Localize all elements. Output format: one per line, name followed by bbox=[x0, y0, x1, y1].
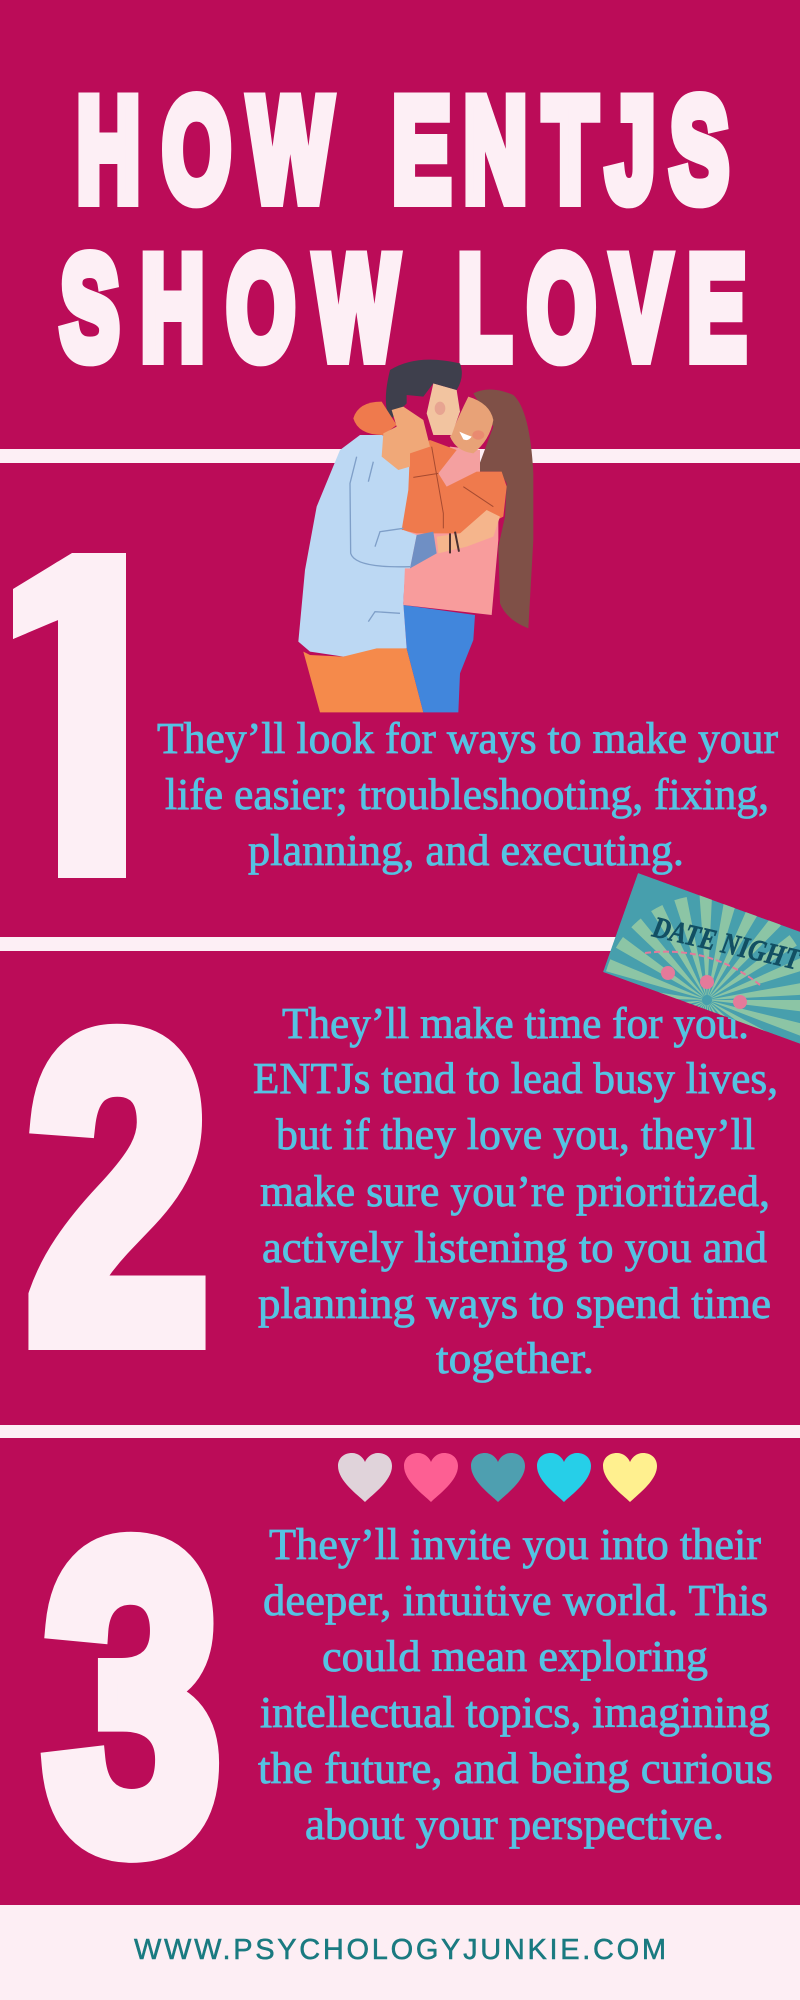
text block: point 2: planning ways to spend time bbox=[258, 1279, 771, 1328]
text block: point 1: life easier; troubleshooting, fixing, bbox=[165, 770, 769, 819]
text block: point 2: actively listening to you and bbox=[262, 1223, 767, 1272]
text block: point 2: They’ll make time for you. bbox=[282, 999, 749, 1048]
footer url: WWW.PSYCHOLOGYJUNKIE.COM bbox=[134, 1934, 666, 1966]
numeral 2: 2 bbox=[27, 947, 209, 1428]
text block: point 2 bbox=[253, 999, 778, 1383]
text block: point 3: the future, and being curious bbox=[258, 1744, 773, 1793]
text block: point 2: but if they love you, they’ll bbox=[276, 1110, 755, 1159]
title: SHOW LOVE bbox=[61, 226, 746, 390]
text block: point 1: planning, and executing. bbox=[248, 826, 684, 875]
text block: point 1: They’ll look for ways to make your bbox=[157, 714, 778, 763]
footer band bbox=[0, 1905, 800, 2000]
icon: date night ticket bbox=[603, 873, 800, 1055]
icons: row of five hearts bbox=[338, 1453, 657, 1502]
title bbox=[61, 68, 746, 390]
title: HOW ENTJS bbox=[77, 68, 729, 232]
numeral 3: 3 bbox=[44, 1457, 221, 1937]
text block: point 3: They’ll invite you into their bbox=[269, 1520, 761, 1569]
text block: point 2: ENTJs tend to lead busy lives, bbox=[253, 1054, 778, 1103]
text block: point 3: could mean exploring bbox=[322, 1632, 708, 1681]
text block: point 1 bbox=[157, 714, 778, 875]
text block: point 3: about your perspective. bbox=[305, 1800, 724, 1849]
text block: point 3: intellectual topics, imagining bbox=[260, 1688, 770, 1737]
text block: point 2: together. bbox=[436, 1334, 594, 1383]
text block: point 2: make sure you’re prioritized, bbox=[260, 1167, 770, 1216]
text block: point 3: deeper, intuitive world. This bbox=[263, 1576, 768, 1625]
text block: point 3 bbox=[258, 1520, 773, 1849]
illustration: hugging couple bbox=[298, 360, 533, 712]
